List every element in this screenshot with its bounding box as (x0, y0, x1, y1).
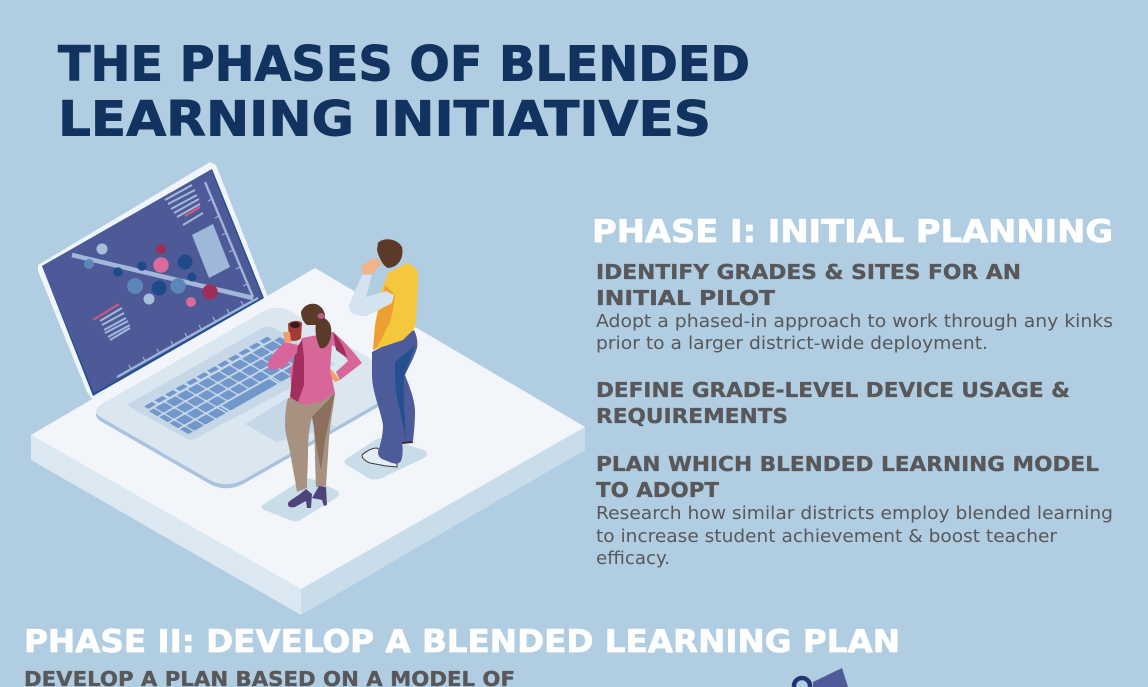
laptop base (96, 308, 378, 488)
screen panel (192, 224, 230, 278)
phase II heading: PHASE II: DEVELOP A BLENDED LEARNING PLAN (24, 624, 900, 660)
phase I item: identify grades and sites: prior to a larger district-wide deployment. (596, 333, 988, 354)
right arm and hand (329, 368, 340, 382)
shoes (362, 448, 397, 467)
mug (288, 321, 302, 341)
phase I heading: PHASE I: INITIAL PLANNING (592, 214, 1113, 250)
person: woman (262, 304, 362, 521)
keyboard bed (128, 326, 336, 440)
phase I item: blended model: to increase student achievement & boost teacher (596, 526, 1058, 547)
phase I item: blended model: TO ADOPT (596, 478, 719, 502)
head (377, 239, 402, 268)
phase I item: device usage (596, 378, 1070, 428)
trousers (372, 330, 417, 464)
sleeve (349, 274, 394, 316)
head and ponytail (301, 304, 325, 325)
screen axes (72, 182, 258, 377)
trackpad (245, 398, 336, 442)
title: THE PHASES OF BLENDED (58, 36, 750, 92)
shoes (288, 489, 312, 508)
phase I item: identify grades and sites (596, 260, 1113, 354)
phase I item: device usage: DEFINE GRADE-LEVEL DEVICE USAGE & (596, 378, 1070, 402)
phase I item: identify grades and sites: Adopt a phased-in approach to work through any kinks (596, 311, 1113, 332)
keyboard keys (144, 334, 320, 434)
floor shadow (262, 479, 339, 521)
hand (361, 258, 382, 275)
scatter bubbles (84, 244, 218, 307)
illustration: people on a giant laptop (31, 162, 585, 615)
phase I item: identify grades and sites: INITIAL PILOT (596, 286, 775, 310)
phase I item: identify grades and sites: IDENTIFY GRADES & SITES FOR AN (596, 260, 1021, 284)
left arm (267, 342, 298, 370)
laptop screen (38, 162, 268, 399)
title: LEARNING INITIATIVES (58, 92, 711, 148)
phase I item: blended model: Research how similar districts employ blended learning (596, 503, 1113, 524)
phase I item: device usage: REQUIREMENTS (596, 404, 788, 428)
floor shadow (345, 438, 427, 480)
person: man (345, 239, 427, 480)
screen text lines (93, 185, 203, 340)
phase I item: blended model (596, 452, 1113, 569)
legs (285, 393, 335, 492)
phase I item: blended model: PLAN WHICH BLENDED LEARNING MODEL (596, 452, 1099, 476)
top (290, 332, 335, 405)
icon: megaphone (794, 668, 848, 687)
phase I item: blended model: efficacy. (596, 548, 670, 569)
vest (373, 263, 418, 350)
title (58, 36, 750, 148)
platform (31, 268, 585, 615)
